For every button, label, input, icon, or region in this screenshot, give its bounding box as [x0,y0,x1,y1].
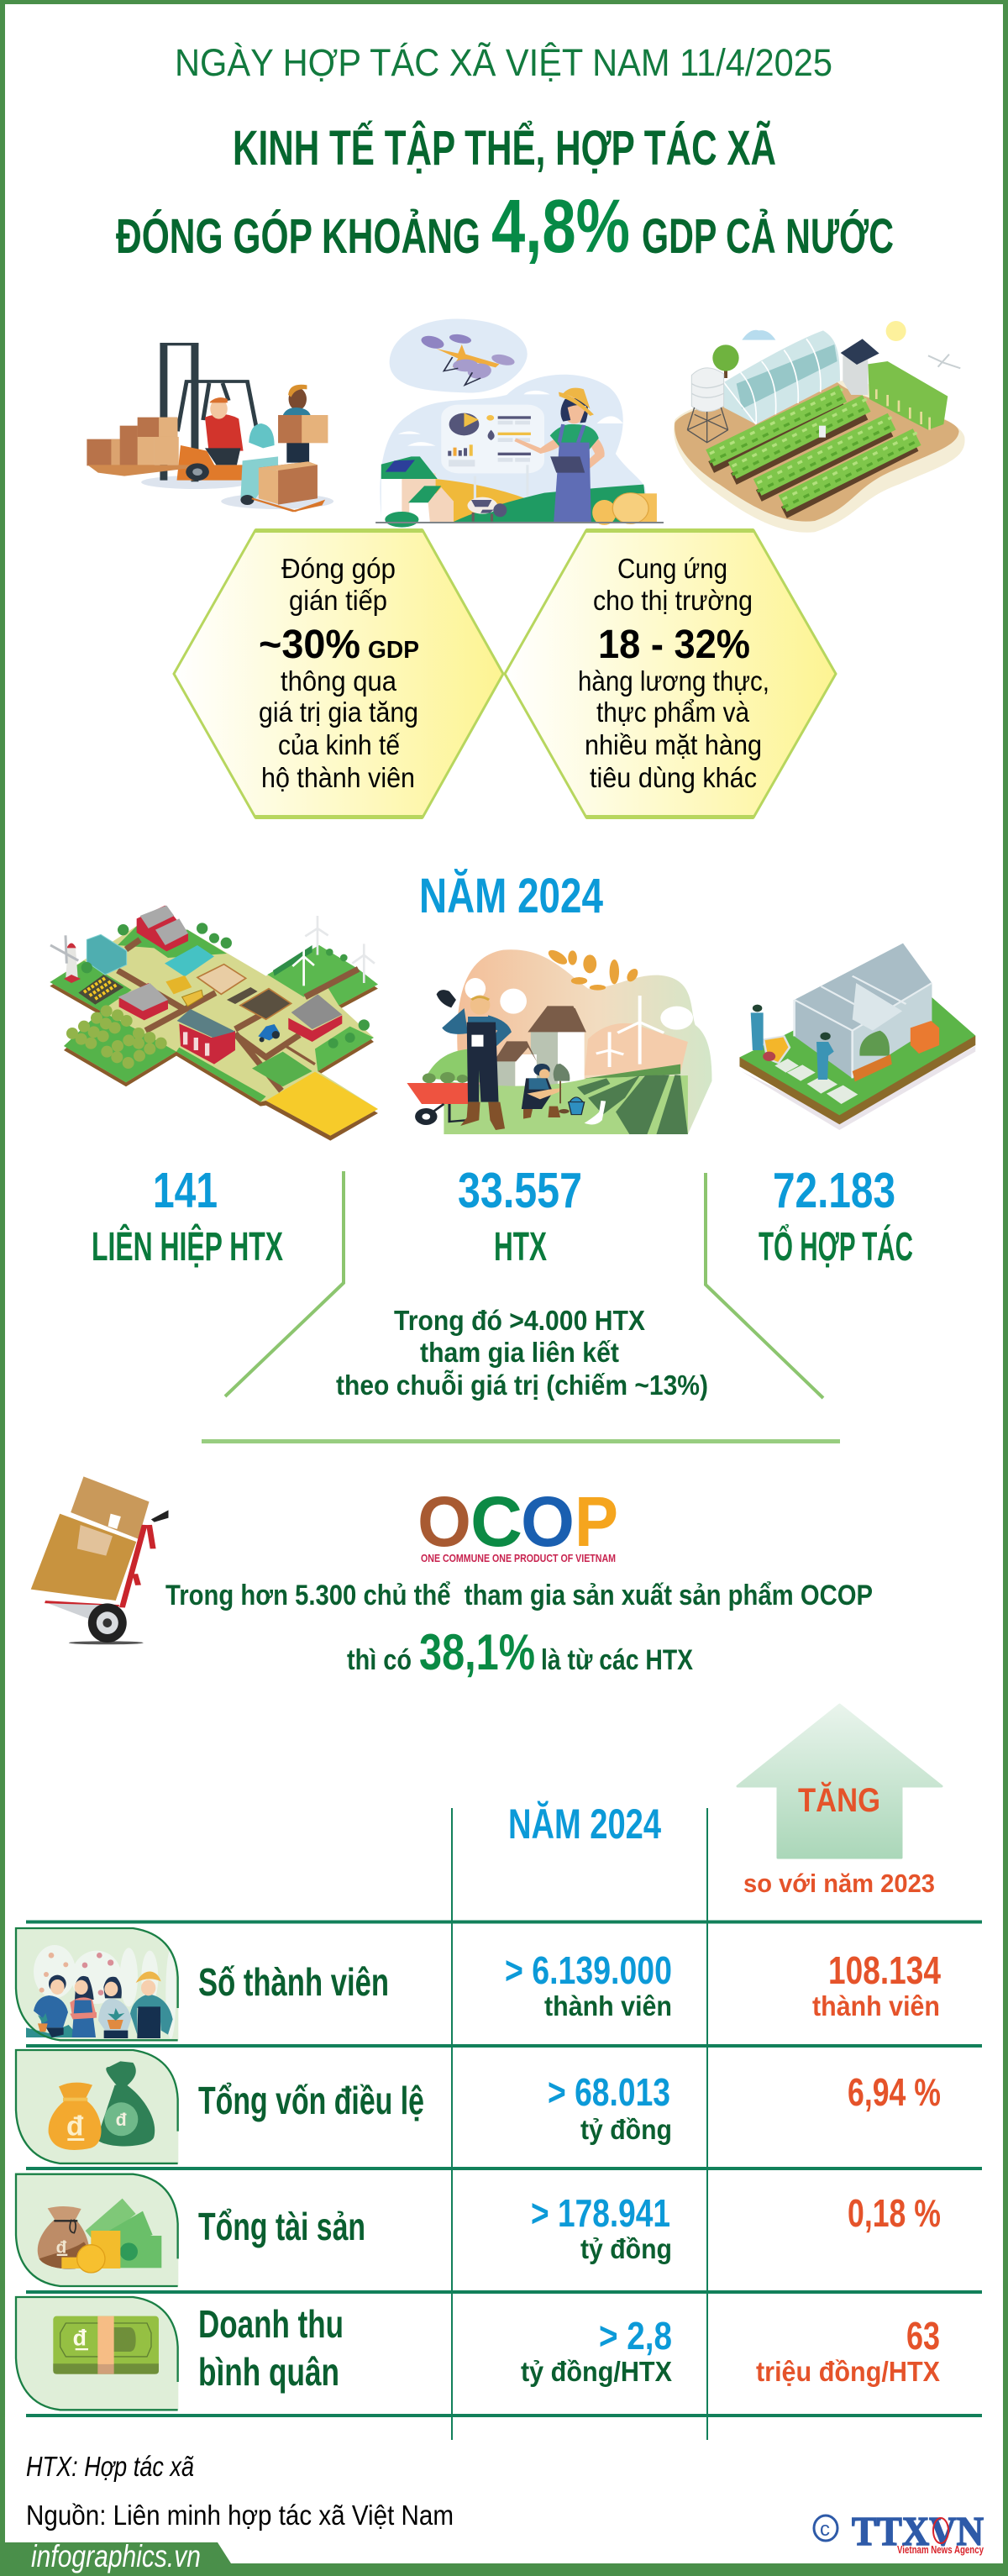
logo: OCOP: C [470,1482,522,1561]
bracket lines [225,1171,823,1398]
hexagon: indirect contribution: GDP [368,637,419,664]
harvester [165,975,203,1007]
text: OCOP share: Trong hơn 5.300 chủ thể tham gia sản xuất sản phẩm OCOP [165,1580,873,1611]
hexagon: indirect contribution: thông qua [281,665,397,697]
row: members: Số thành viên [198,1960,389,2004]
corn [868,361,948,430]
orchard trees [66,1005,167,1069]
row: charter capital: tỷ đồng [580,2114,672,2145]
hay bales [592,493,657,525]
yellow field [266,1072,378,1136]
hexagon: indirect contribution: gián tiếp [289,585,387,616]
row: average revenue: tỷ đồng/HTX [521,2356,672,2387]
hexagon: market supply: cho thị trường [593,585,753,616]
field rows [577,1075,688,1134]
row: members [16,1928,941,2040]
title: KINH TẾ TẬP THỂ, HỢP TÁC XÃ [233,121,776,176]
wheelbarrow [407,1072,469,1125]
row: charter capital: > 68.013 [548,2070,670,2114]
hexagon: indirect contribution: giá trị gia tăng [259,697,418,728]
data panel [441,405,544,473]
illustration: smart-farming woman and drone [375,318,664,528]
greenhouse [724,330,840,424]
row: average revenue: Doanh thu [198,2302,344,2346]
solar station [841,339,879,395]
farmer with shovel [437,990,512,1130]
hexagon: market supply: 18 - 32% [598,623,750,667]
hexagon: indirect contribution: ~30% [259,623,360,667]
row: total assets: > 178.941 [531,2191,670,2235]
note: abbreviation: HTX: Hợp tác xã [26,2451,194,2482]
wind turbines [596,996,664,1067]
row: total assets: tỷ đồng [580,2233,672,2264]
stat: union of cooperatives: 141 [153,1163,218,1218]
row: charter capital: 6,94 % [848,2070,941,2114]
sunflower plot [78,975,123,1005]
crouching farmer [522,1064,570,1119]
row: charter capital [16,2050,941,2163]
greenhouse [87,934,127,975]
text: value chain: tham gia liên kết [420,1337,619,1368]
icon: money bags: đ [66,2111,84,2142]
row: average revenue: 63 [906,2314,940,2358]
text: value chain: Trong đó >4.000 HTX [394,1305,645,1336]
logo: OCOP: P [575,1482,618,1561]
stat: cooperatives: HTX [494,1225,547,1270]
icon: banknote stack [16,2297,178,2410]
water tank [687,368,728,443]
row: total assets: 0,18 % [848,2191,941,2235]
row: average revenue: > 2,8 [599,2314,672,2358]
goose [585,1101,606,1125]
footer tab: website: infographics.vn [31,2539,201,2573]
logo: OCOP: O [417,1482,471,1561]
hexagon: market supply: hàng lương thực, [578,665,769,697]
windmill [50,935,81,983]
logo: TTXVN: TTXVN [852,2508,984,2554]
stat: cooperative groups [759,1163,913,1270]
tree [712,344,739,378]
title: 4,8% [491,185,630,269]
hexagon: market supply: nhiều mặt hàng [585,729,762,760]
arrow: increase [738,1705,942,1858]
hexagon: market supply [505,528,836,819]
barns [118,906,342,1065]
hexagon: market supply: Cung ứng [617,553,727,584]
stepping stones [774,1059,858,1104]
illustration: forklift and workers [87,343,333,511]
logo: OCOP: ONE COMMUNE ONE PRODUCT OF VIETNAM [421,1552,616,1564]
stat: cooperatives: 33.557 [458,1163,582,1218]
clouds [465,978,693,1030]
text: OCOP share [165,1580,873,1680]
vegetable rows [710,389,917,513]
heading: year 2024: NĂM 2024 [419,869,603,923]
row: members: > 6.139.000 [505,1948,672,1992]
icon: members [16,1928,178,2040]
overline: date: NGÀY HỢP TÁC XÃ VIỆT NAM 11/4/2025 [175,41,832,84]
stat: union of cooperatives: LIÊN HIỆP HTX [92,1223,283,1270]
row: total assets [16,2174,941,2286]
houses [381,456,454,528]
row: total assets: Tổng tài sản [198,2205,365,2248]
hexagon: indirect contribution: của kinh tế [278,729,400,760]
row: charter capital: Tổng vốn điều lệ [198,2079,424,2122]
hexagon: indirect contribution: hộ thành viên [261,762,415,793]
pond [165,945,214,976]
icon: drone [418,333,517,385]
text: value chain [336,1305,708,1401]
row: average revenue: bình quân [198,2350,339,2394]
cow [467,497,507,522]
row: members: thành viên [544,1990,672,2021]
column heading: year 2024: NĂM 2024 [508,1801,661,1848]
small drone and sensor [819,355,960,438]
illustration: farmers, wheelbarrow and fields [407,944,975,1134]
text: value chain: theo chuỗi giá trị (chiếm ~13%) [336,1369,708,1401]
title: GDP CẢ NƯỚC [642,209,894,264]
houses [494,1006,586,1086]
tractor [258,1024,280,1042]
woman farmer [514,388,605,523]
icon: money bags [16,2050,178,2163]
icon: bag, cash and coins [16,2174,178,2286]
animal pens [197,965,291,1019]
logo: TTXVN: c [820,2518,830,2541]
crop strip [252,1052,312,1086]
wind turbines [292,916,375,986]
stat: cooperative groups: 72.183 [773,1163,895,1218]
icon: money bags: đ [116,2110,127,2130]
logo: OCOP: O [521,1482,575,1561]
text: OCOP share: thì có [347,1644,412,1676]
icon: banknote stack: đ [73,2326,87,2351]
tree lines [81,923,370,1049]
illustration: isometric cooperative farm [50,906,378,1141]
stat: cooperative groups: TỔ HỢP TÁC [759,1223,913,1270]
illustration: greenhouse with vegetable field [674,321,965,533]
hexagon: market supply: thực phẩm và [596,697,750,728]
row: members: thành viên [812,1990,940,2021]
arrow: increase: TĂNG [798,1781,880,1819]
stat: cooperatives [458,1163,582,1270]
text: OCOP share: là từ các HTX [541,1644,693,1676]
hexagon: market supply: tiêu dùng khác [590,762,757,793]
wheat [545,948,640,991]
title [116,121,894,269]
wooden fence [283,1044,315,1065]
logo: OCOP [417,1482,618,1564]
label: compared with 2023: so với năm 2023 [743,1869,935,1898]
row: members: 108.134 [828,1948,941,1992]
bucket [569,1097,585,1115]
title: ĐÓNG GÓP KHOẢNG [116,209,480,264]
text: OCOP share: 38,1% [419,1624,535,1680]
row: average revenue [16,2297,940,2410]
icon: bag, cash and coins: đ [56,2238,67,2258]
hexagon: indirect contribution: Đóng góp [281,553,396,584]
row: average revenue: triệu đồng/HTX [756,2356,940,2387]
hexagon: indirect contribution [174,528,503,819]
illustration: hand truck with boxes [31,1476,169,1644]
greenhouse scene [739,944,975,1130]
stat: union of cooperatives [92,1163,283,1270]
source: Nguồn: Liên minh hợp tác xã Việt Nam [26,2500,454,2531]
